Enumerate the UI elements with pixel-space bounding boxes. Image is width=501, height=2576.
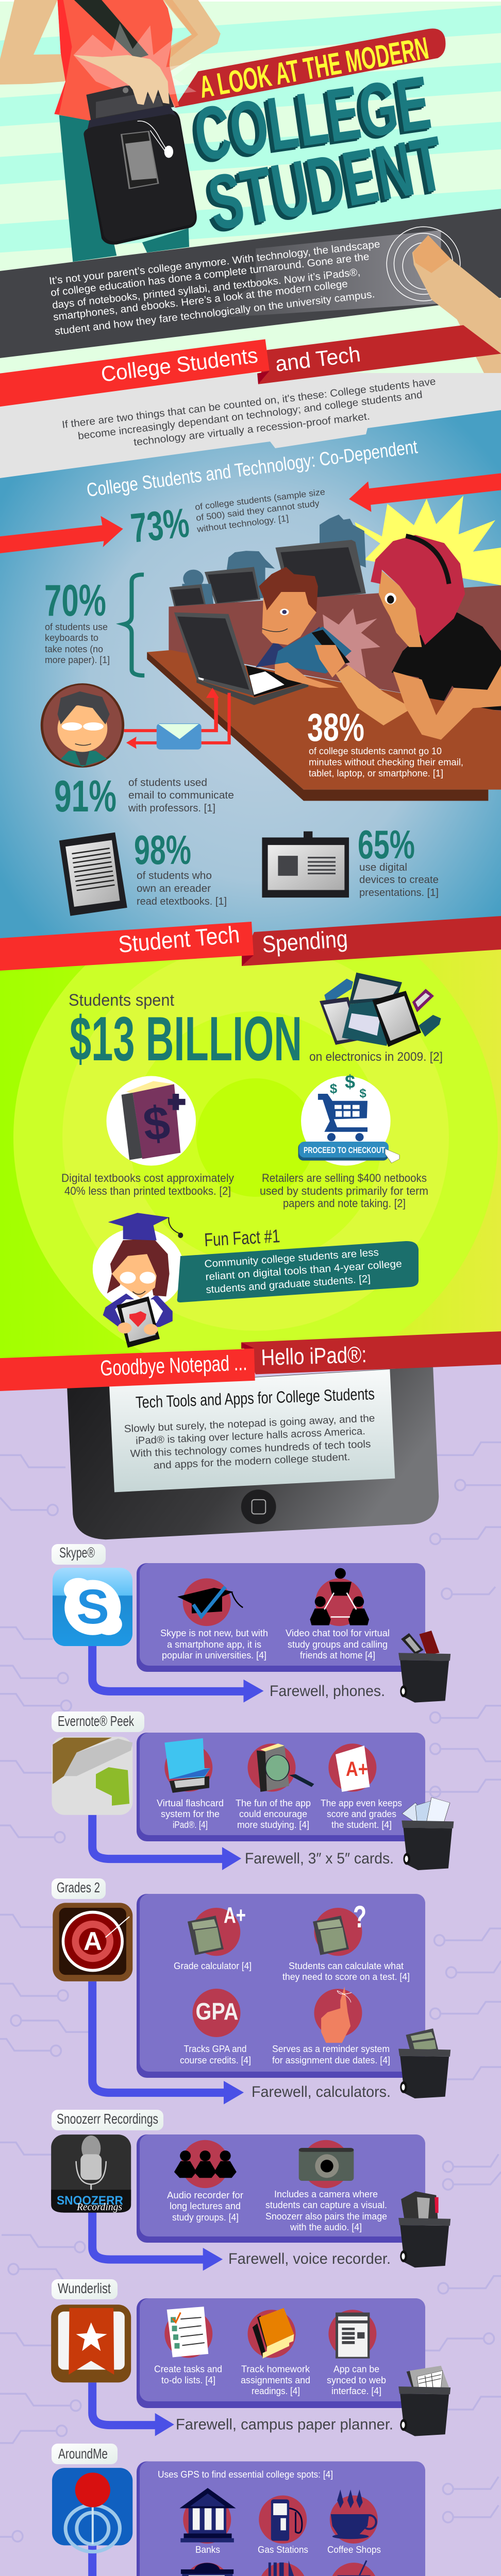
ribbon: goodbye notepad, hello ipad [0, 1331, 501, 1391]
text: wunderlist features: Track homework [241, 2364, 310, 2374]
icon: video chat group [310, 1568, 369, 1626]
text: wunderlist features: App can be [333, 2364, 379, 2374]
fun fact #1: Community college students are less [204, 1247, 379, 1270]
stat: 91%: with professors. [1] [128, 803, 215, 814]
text: snoozerr features: long lectures and [170, 2201, 241, 2211]
arrow and farewell phones [243, 1680, 385, 1703]
text: wunderlist features [154, 2364, 386, 2396]
stat: 73%: of college students (sample size [194, 487, 326, 512]
text: digital textbooks cost [61, 1172, 234, 1197]
striped background [0, 6, 501, 252]
stat: 73%: 73% [128, 500, 191, 551]
stat: $13 billion: Students spent [69, 991, 174, 1009]
icon: snoozerr microphone: Recordings [76, 2201, 122, 2213]
text on ipad screen: and apps for the modern college student. [153, 1451, 350, 1471]
panel: college students and tech [0, 325, 501, 486]
intro text: days of notebooks, printed syllabi, and textbooks. Now it’s iPads®, [52, 266, 361, 311]
intro text: student and how they fare technologically on the university campus. [54, 289, 375, 337]
icon: to-do list [164, 2307, 212, 2358]
icon: digital textbook price [106, 1076, 196, 1166]
icon: a+ paper [328, 1743, 376, 1792]
icon: projector screen [262, 832, 349, 897]
stat: 38%: of college students cannot go 10 [309, 746, 442, 756]
text: evernote columns: system for the [161, 1809, 220, 1819]
stat: 70%: keyboards to [45, 633, 98, 643]
icon: checkout cart: PROCEED TO CHECKOUT [304, 1145, 385, 1155]
stat: 98%: own an ereader [137, 883, 211, 894]
text: wunderlist features: synced to web [327, 2375, 386, 2385]
icon: bin with calculator [398, 2028, 450, 2098]
stat: 73% [128, 487, 326, 551]
app: aroundme [52, 2444, 450, 2576]
text: wunderlist features: readings. [4] [252, 2386, 300, 2396]
arrow and farewell planner: Farewell, campus paper planner. [176, 2416, 393, 2433]
label: snoozerr recordings [52, 2110, 163, 2130]
stat: 91%: of students used [128, 777, 207, 788]
stat: 70%: of students use [45, 622, 108, 632]
red arrows [0, 473, 501, 553]
app: evernote peek [52, 1711, 454, 1870]
arrow and farewell phones: Farewell, phones. [270, 1683, 385, 1700]
ribbon: student tech spending: Student Tech [117, 921, 241, 958]
text: retailers netbooks [260, 1172, 428, 1210]
label: skype [52, 1544, 106, 1565]
text: snoozerr features: Snoozerr also pairs the image [265, 2211, 387, 2222]
label: skype: Skype® [59, 1545, 95, 1561]
text: wunderlist features: to-do lists. [4] [161, 2375, 215, 2385]
icon: camera [299, 2140, 354, 2188]
text: digital textbooks cost: Digital textbooks cost approximately [61, 1172, 234, 1184]
text: evernote columns: iPad®. [4] [173, 1820, 208, 1830]
text: skype column 2: study groups and calling [288, 1639, 388, 1650]
text: wunderlist features: assignments and [241, 2375, 310, 2385]
text: wunderlist features: Create tasks and [154, 2364, 222, 2374]
text: evernote columns: could encourage [239, 1809, 307, 1819]
text on ipad screen: Slowly but surely, the notepad is going away, and the [124, 1413, 375, 1435]
heading: co-dependent: College Students and Technology: Co-Dependent [86, 436, 419, 501]
arrow and farewell calculators: Farewell, calculators. [252, 2083, 391, 2100]
text: evernote columns: The app even keeps [321, 1798, 402, 1808]
text: wunderlist features: interface. [4] [331, 2386, 381, 2396]
stat: 38%: tablet, laptop, or smartphone. [1] [309, 768, 443, 778]
heading: college student [185, 60, 450, 249]
stat: 38%: 38% [307, 706, 364, 750]
stat: 91% [54, 772, 234, 821]
icon: grades target: A [84, 1927, 102, 1956]
card: snoozerr features [137, 2134, 425, 2243]
text: evernote columns [157, 1798, 402, 1830]
text: grades features: for assignment due dates. [4] [272, 2055, 390, 2065]
stat: $13 billion: on electronics in 2009. [2] [309, 1050, 443, 1064]
illustration: ipad [67, 1366, 439, 1539]
arrow and farewell cards: Farewell, 3″ x 5″ cards. [245, 1850, 394, 1867]
icon: gpa: GPA [196, 1998, 238, 2025]
text: snoozerr features: Includes a camera where [274, 2189, 378, 2199]
intro text: of college education has done a complete turnaround. Gone are the [50, 251, 370, 299]
icon: calculators: ? [353, 1900, 366, 1934]
text: spot labels: Gas Stations [258, 2545, 308, 2555]
illustration: student with tablet bag [0, 0, 221, 262]
ribbon: goodbye notepad, hello ipad: Goodbye Notepad ... [100, 1350, 247, 1380]
text: grades features: they need to score on a test. [4] [282, 1972, 410, 1982]
icon: checkout cart: $ [359, 1087, 366, 1100]
ribbon: college students and tech [0, 325, 501, 406]
icon: aroundme pin [52, 2468, 132, 2552]
ribbon: college students and tech: and Tech [274, 342, 362, 376]
brace [124, 574, 144, 675]
label: aroundme: AroundMe [58, 2446, 108, 2462]
stat: 38% [307, 706, 463, 778]
text: spot labels [179, 2545, 381, 2576]
stat: 98%: of students who [137, 870, 212, 882]
stat: 73%: without technology. [1] [196, 513, 289, 534]
icon: e-reader [59, 833, 127, 916]
title ribbon: a look at the modern [174, 28, 445, 108]
text: spot labels: Coffee Shops [327, 2545, 381, 2555]
text: skype column 1: a smartphone app, it is [167, 1639, 261, 1650]
icon: wunderlist [51, 2304, 131, 2382]
stat: 91%: 91% [54, 772, 116, 821]
text: retailers netbooks: Retailers are selling $400 netbooks [262, 1172, 427, 1184]
text on ipad screen: With this technology comes hundreds of tech tools [130, 1438, 371, 1460]
text: skype column 2 [286, 1628, 390, 1660]
stat: 70%: 70% [44, 576, 106, 625]
icon: calculators [188, 1900, 366, 1956]
stat: 38%: minutes without checking their email, [309, 757, 463, 768]
icon: web app screen [328, 2310, 376, 2359]
icon: bin with phones [398, 1631, 450, 1703]
intro text: It’s not your parent’s college anymore. With technology, the landscape [48, 239, 381, 287]
fun fact #1: Fun Fact #1 [204, 1225, 280, 1250]
icon: snoozerr microphone: SNOOZERR [57, 2194, 123, 2208]
arrow and farewell voice recorder: Farewell, voice recorder. [228, 2250, 391, 2267]
icon: bin with recorders [398, 2191, 450, 2267]
stat: 91%: email to communicate [128, 790, 234, 801]
text: retailers netbooks: papers and note taking. [2] [283, 1197, 406, 1210]
text: spot labels: Banks [195, 2545, 220, 2555]
label: wunderlist [52, 2279, 118, 2299]
label: evernote peek: Evernote® Peek [58, 1713, 135, 1729]
text: uses gps: Uses GPS to find essential college spots: [4] [158, 2469, 333, 2480]
text: retailers netbooks: used by students primarily for term [260, 1184, 428, 1197]
stat: 65%: use digital [359, 862, 407, 873]
intro paragraph: technology are virtually a recession-proof market. [133, 411, 371, 448]
stat: 70%: more paper). [1] [45, 655, 110, 665]
icon: checkout cart: $ [330, 1081, 338, 1096]
text on ipad screen: Tech Tools and Apps for College Students [135, 1384, 375, 1412]
connector pipes [92, 1646, 246, 2576]
text: skype column 2: friends at home [4] [300, 1650, 375, 1660]
icon: calculators: A+ [224, 1903, 246, 1928]
app: snoozerr recordings [51, 2110, 450, 2270]
ribbon: goodbye notepad, hello ipad: Hello iPad®: [261, 1342, 367, 1370]
fun fact #1: students and graduate students. [2] [206, 1273, 371, 1296]
stat: 70% [44, 576, 110, 665]
text: snoozerr features: with the audio. [4] [290, 2222, 362, 2232]
icon: group of students [174, 2140, 237, 2188]
icon: skype: S [76, 1580, 109, 1634]
text: evernote columns: more studying. [4] [237, 1820, 309, 1830]
text: skype column 2: Video chat tool for virtual [286, 1628, 390, 1638]
text: evernote columns: the student. [4] [331, 1820, 392, 1830]
label: grades 2: Grades 2 [57, 1879, 100, 1895]
text: skype column 1: Skype is not new, but with [160, 1628, 268, 1638]
stat: 98%: 98% [134, 827, 191, 873]
icon: devices pile [320, 973, 441, 1047]
icon: evernote [52, 1737, 132, 1815]
ribbon: student tech spending: Spending [261, 925, 348, 958]
app: grades 2 [52, 1878, 450, 2105]
stat: $13 billion: $13 BILLION [70, 1004, 302, 1074]
text: grades features: Students can calculate what [289, 1961, 404, 1971]
intro paragraph: If there are two things that can be counted on, it's these: College students have [61, 376, 437, 431]
text on ipad screen: iPad® is taking over lecture halls across America. [136, 1426, 365, 1447]
label: wunderlist: Wunderlist [58, 2280, 111, 2296]
card: aroundme features [137, 2462, 425, 2576]
intro paragraph: become increasingly dependant on technology; and college students and [77, 389, 423, 442]
icon: books [247, 2308, 296, 2359]
app: skype [52, 1544, 450, 1703]
icon: checkout cart: $ [345, 1071, 355, 1092]
icon: grades target [53, 1903, 132, 1981]
icon: reminder finger [314, 1987, 362, 2043]
dark intro band [0, 209, 501, 358]
stat: 65%: devices to create [359, 874, 439, 886]
panel: goodbye notepad hello ipad [0, 1331, 501, 2576]
icon: book and magnifier [247, 1743, 314, 1792]
stat: 65% [358, 822, 439, 899]
panel: co-dependent stats [0, 410, 501, 969]
text: snoozerr features: Audio recorder for [167, 2190, 243, 2200]
text: evernote columns: score and grades [327, 1809, 396, 1819]
card: evernote features [137, 1733, 425, 1841]
illustration: graduate with tablet [93, 1213, 184, 1348]
text: grades features: course credits. [4] [180, 2055, 251, 2065]
icon: mortarboard and check [177, 1579, 243, 1626]
icon: gpa [193, 1989, 240, 2037]
app: wunderlist [51, 2279, 450, 2436]
card: wunderlist features [137, 2298, 425, 2408]
icon: flashcard [164, 1738, 212, 1793]
illustration: students at laptops [147, 496, 501, 801]
arrow and farewell planner [155, 2413, 393, 2436]
fun fact #1: reliant on digital tools than 4-year college [205, 1258, 402, 1283]
text: evernote columns: Virtual flashcard [157, 1798, 224, 1808]
intro text: smartphones, and ebooks. Here’s a look at the modern college [53, 278, 348, 323]
stat: 70%: take notes (no [45, 644, 103, 654]
text: digital textbooks cost: 40% less than printed textbooks. [2] [64, 1184, 231, 1197]
arrow and farewell cards [222, 1847, 394, 1870]
text: skype column 1: popular in universities. [4] [162, 1650, 266, 1660]
text: grades features: Grade calculator [4] [174, 1961, 252, 1971]
intro text [48, 239, 381, 337]
text: snoozerr features: students can capture a visual. [265, 2200, 387, 2210]
ribbon: college students and tech: College Students [99, 343, 259, 386]
icon: professor with email [42, 684, 231, 767]
card: skype features [137, 1563, 425, 1672]
icon: checkout cart [298, 1071, 399, 1166]
icons: essential spots [179, 2488, 378, 2576]
circuit background lines [0, 1443, 501, 2576]
text: grades features: Tracks GPA and [183, 2044, 246, 2054]
card: grades features [137, 1894, 425, 2078]
stat: 98% [134, 827, 227, 907]
arrow and farewell voice recorder [203, 2248, 391, 2270]
text: snoozerr features [167, 2189, 387, 2232]
icon: digital textbook price: $ [141, 1096, 173, 1151]
arrow and farewell calculators [224, 2081, 391, 2105]
band highlight and thumb with ripples [192, 227, 501, 407]
label: grades 2 [52, 1878, 106, 1899]
text: skype column 1 [160, 1628, 268, 1660]
stat: 65%: presentations. [1] [359, 887, 439, 899]
green rings background [0, 950, 501, 1358]
label: aroundme [52, 2444, 118, 2464]
label: snoozerr recordings: Snoozerr Recordings [57, 2111, 158, 2127]
text: evernote columns: The fun of the app [236, 1798, 311, 1808]
stat: 73%: of 500) said they cannot study [195, 498, 320, 523]
text: grades features: Serves as a reminder system [272, 2044, 390, 2054]
panel: student tech spending [0, 895, 501, 1380]
fun fact #1 [177, 1225, 419, 1302]
panel: header [0, 0, 501, 407]
stat: 65%: 65% [358, 822, 415, 867]
icon: bin with planner [398, 2366, 450, 2436]
text: grades features [174, 1961, 410, 2065]
text on ipad screen [124, 1384, 375, 1471]
icon: bin with index cards [402, 1798, 454, 1870]
text: snoozerr features: study groups. [4] [172, 2212, 239, 2223]
label: evernote peek [52, 1711, 144, 1732]
icon: a+ paper: A+ [346, 1758, 368, 1781]
icon: skype [53, 1568, 132, 1646]
ribbon: student tech spending [0, 916, 501, 971]
icon: snoozerr microphone [51, 2134, 131, 2213]
stat: 98%: read etextbooks. [1] [137, 896, 227, 907]
